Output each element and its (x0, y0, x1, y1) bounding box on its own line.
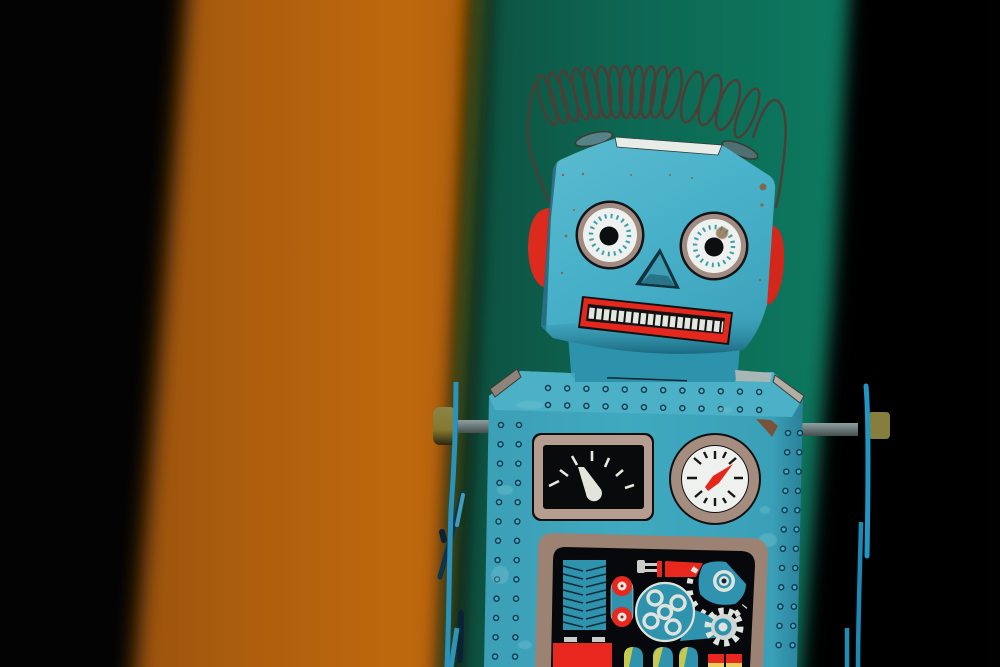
knob: right (720, 137, 760, 163)
coloured capsules (624, 647, 698, 667)
rivet left (490, 369, 521, 397)
ear: right (767, 225, 784, 305)
neck slit (607, 377, 687, 382)
left eye (576, 200, 644, 270)
batteries (708, 654, 742, 667)
tread (563, 560, 606, 630)
robot head (541, 129, 775, 354)
robot arm axle (433, 407, 890, 445)
machine window (535, 533, 768, 667)
dial panel (532, 433, 654, 521)
head plate (615, 137, 722, 155)
wear patches (491, 401, 777, 649)
right hand (847, 386, 868, 667)
mouth (578, 296, 733, 345)
left hand (440, 382, 463, 667)
rust spot (756, 419, 778, 437)
ring dots: side columns (495, 425, 800, 660)
antenna spring (528, 65, 786, 208)
small red wheels (611, 576, 633, 627)
head wear speckles (561, 173, 766, 281)
robot body (484, 369, 804, 667)
piston (637, 560, 703, 577)
red box (553, 637, 612, 667)
belt arm (680, 608, 725, 641)
pressure gauge (669, 433, 761, 525)
knob: left (574, 129, 614, 149)
rivet right (773, 375, 804, 403)
white gear (708, 611, 740, 643)
ear: left (528, 208, 550, 289)
silver strap (735, 370, 772, 382)
nose (635, 248, 680, 289)
ring dots: top rows (548, 388, 762, 410)
robot neck (568, 335, 740, 385)
large wheel (636, 583, 694, 641)
blue gear (689, 561, 746, 618)
right eye (680, 212, 748, 280)
shoulder top (489, 371, 803, 417)
